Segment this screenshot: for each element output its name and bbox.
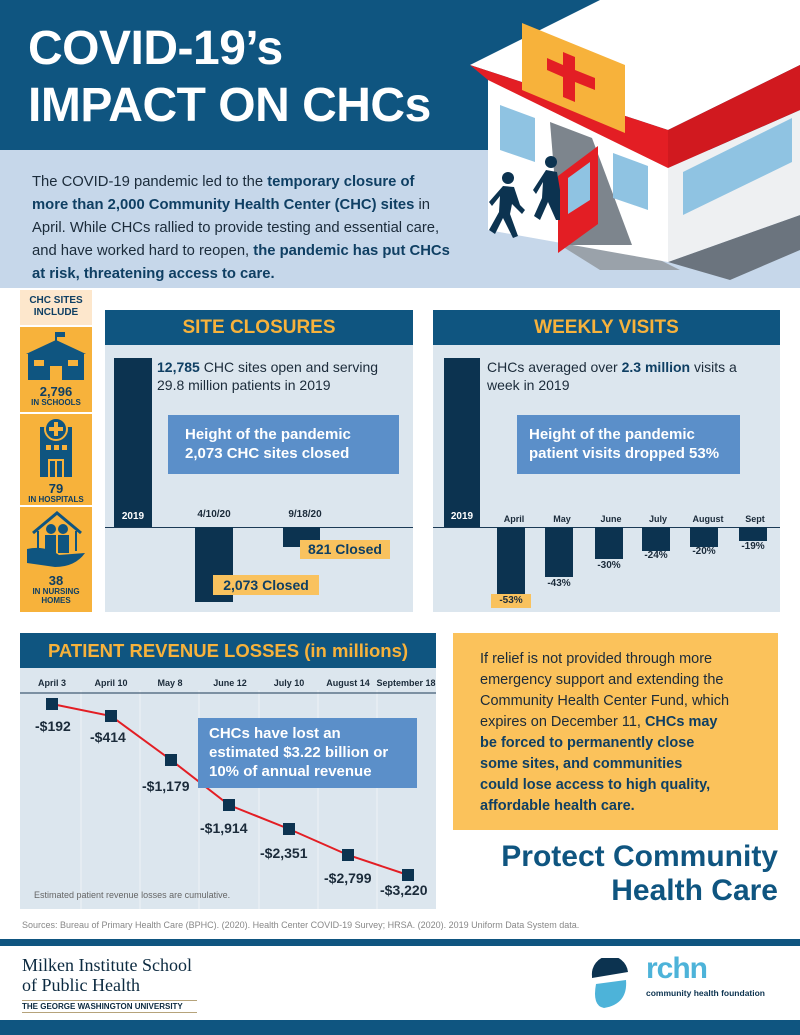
line chart — [20, 678, 436, 909]
panel: site closures: 2,073 Closed — [223, 577, 309, 593]
intro text: at risk, threatening access to care. — [32, 266, 275, 282]
title: IMPACT ON CHCs — [28, 79, 431, 132]
bars months: -43% — [547, 578, 571, 589]
icon block: nursing homes — [20, 507, 92, 612]
callout: relief box — [453, 633, 778, 830]
bar 2019 — [114, 358, 152, 527]
logo: rchn — [592, 952, 765, 1008]
callout: relief box: expires on December 11, CHCs may — [480, 714, 717, 730]
bars months: July — [649, 514, 667, 524]
bars months: -24% — [644, 550, 668, 561]
bars months — [491, 514, 767, 608]
heading — [433, 310, 780, 345]
bars months: Sept — [745, 514, 765, 524]
panel: patient revenue losses — [20, 633, 436, 909]
callout: relief box: emergency support and extending the — [480, 672, 723, 688]
logo: Milken: THE GEORGE WASHINGTON UNIVERSITY — [22, 1002, 183, 1011]
intro text: and have worked hard to reopen, the pandemic has put CHCs — [32, 243, 450, 259]
bar 2019 — [444, 358, 480, 527]
heading: protect: Protect Community — [501, 840, 778, 873]
panel: site closures — [105, 310, 413, 612]
bars months: -53% — [499, 595, 523, 606]
callout: relief box: some sites, and communities — [480, 756, 682, 772]
bars months: June — [600, 514, 622, 524]
line chart: April 3 — [38, 678, 66, 688]
callout — [168, 415, 399, 474]
line chart: Estimated patient revenue losses are cumulative. — [34, 890, 230, 900]
icon block: hospitals: IN HOSPITALS — [28, 495, 84, 504]
line chart: June 12 — [213, 678, 247, 688]
top band — [0, 0, 800, 150]
panel: weekly visits: 2019 — [451, 511, 473, 522]
icon block: nursing homes: IN NURSING — [32, 587, 80, 596]
bars months: April — [504, 514, 524, 524]
icon block: nursing homes: 38 — [49, 573, 63, 588]
sidebar: CHC sites include — [20, 290, 92, 612]
callout: relief box: If relief is not provided through more — [480, 651, 712, 667]
callout: patient visits dropped 53% — [529, 445, 719, 462]
icon block: hospitals — [20, 414, 92, 505]
bars months: -19% — [741, 541, 765, 552]
line chart: May 8 — [157, 678, 183, 688]
logo: rchn: community health foundation — [646, 988, 765, 998]
intro text: The COVID-19 pandemic led to the temporary closure of — [32, 174, 414, 190]
bars months: -30% — [597, 560, 621, 571]
panel: weekly visits — [433, 310, 780, 612]
heading — [105, 310, 413, 345]
callout — [517, 415, 740, 474]
bar 4/10/20: 4/10/20 — [197, 509, 231, 520]
title — [28, 22, 431, 132]
heading: PATIENT REVENUE LOSSES (in millions) — [48, 640, 408, 661]
line chart: September 18 — [376, 678, 436, 688]
intro text: April. While CHCs rallied to provide testing and essential care, — [32, 220, 439, 236]
line chart: April 10 — [94, 678, 128, 688]
panel: site closures: 821 Closed — [308, 541, 382, 557]
intro band — [0, 150, 800, 288]
callout: CHCs have lost an — [209, 725, 341, 742]
callout: Height of the pandemic — [185, 426, 351, 443]
sources: Sources: Bureau of Primary Health Care (BPHC). (2020). Health Center COVID-19 Survey; HRSA. (2020). 2019 Uniform Data System data. — [22, 920, 579, 930]
text 12,785: 12,785 CHC sites open and serving 29.8 million patients in 2019 — [157, 359, 378, 393]
callout: relief box: affordable health care. — [480, 798, 635, 814]
line chart: -$414 — [90, 729, 126, 745]
callout: relief box: could lose access to high quality, — [480, 777, 710, 793]
heading — [20, 633, 436, 668]
line chart: -$3,220 — [380, 882, 428, 898]
sidebar: CHC sites include: CHC SITES — [29, 295, 83, 306]
bars months: May — [553, 514, 571, 524]
logo: Milken — [22, 955, 197, 1013]
sidebar: CHC sites include: INCLUDE — [34, 307, 78, 318]
heading: SITE CLOSURES — [182, 317, 336, 338]
bar 9/18/20: 9/18/20 — [288, 509, 322, 520]
intro text — [32, 174, 450, 282]
line chart: -$2,799 — [324, 870, 372, 886]
logo: Milken: Milken Institute School — [22, 955, 192, 975]
bars months: August — [692, 514, 724, 524]
callout: relief box: be forced to permanently close — [480, 735, 694, 751]
logo: Milken: of Public Health — [22, 975, 140, 995]
callout: estimated $3.22 billion or — [209, 744, 388, 761]
heading: WEEKLY VISITS — [534, 317, 679, 338]
callout: Height of the pandemic — [529, 426, 695, 443]
icon block: schools — [20, 327, 92, 412]
line chart: -$192 — [35, 718, 71, 734]
icon block: schools: 2,796 — [40, 384, 72, 399]
line chart: -$2,351 — [260, 845, 308, 861]
callout: 2,073 CHC sites closed — [185, 445, 349, 462]
bars months: -20% — [692, 546, 716, 557]
callout: 10% of annual revenue — [209, 763, 372, 780]
callout: relief box: Community Health Center Fund, which — [480, 693, 729, 709]
icon block: hospitals: 79 — [49, 481, 63, 496]
heading: protect: Health Care — [611, 874, 778, 907]
heading: protect — [501, 840, 778, 907]
title: COVID-19’s — [28, 22, 283, 75]
icon block: schools: IN SCHOOLS — [31, 398, 81, 407]
callout — [198, 718, 417, 788]
line chart: August 14 — [326, 678, 370, 688]
icon block: nursing homes: HOMES — [41, 596, 71, 605]
logo: rchn: rchn — [646, 952, 707, 985]
panel: site closures: 2019 — [122, 511, 144, 522]
text: CHCs averaged over 2.3 million visits a week in 2019 — [487, 359, 737, 393]
illustration: clinic building — [470, 0, 800, 280]
intro text: more than 2,000 Community Health Center (CHC) sites in — [32, 197, 430, 213]
line chart: July 10 — [274, 678, 304, 688]
line chart: -$1,914 — [200, 820, 248, 836]
line chart: -$1,179 — [142, 778, 190, 794]
